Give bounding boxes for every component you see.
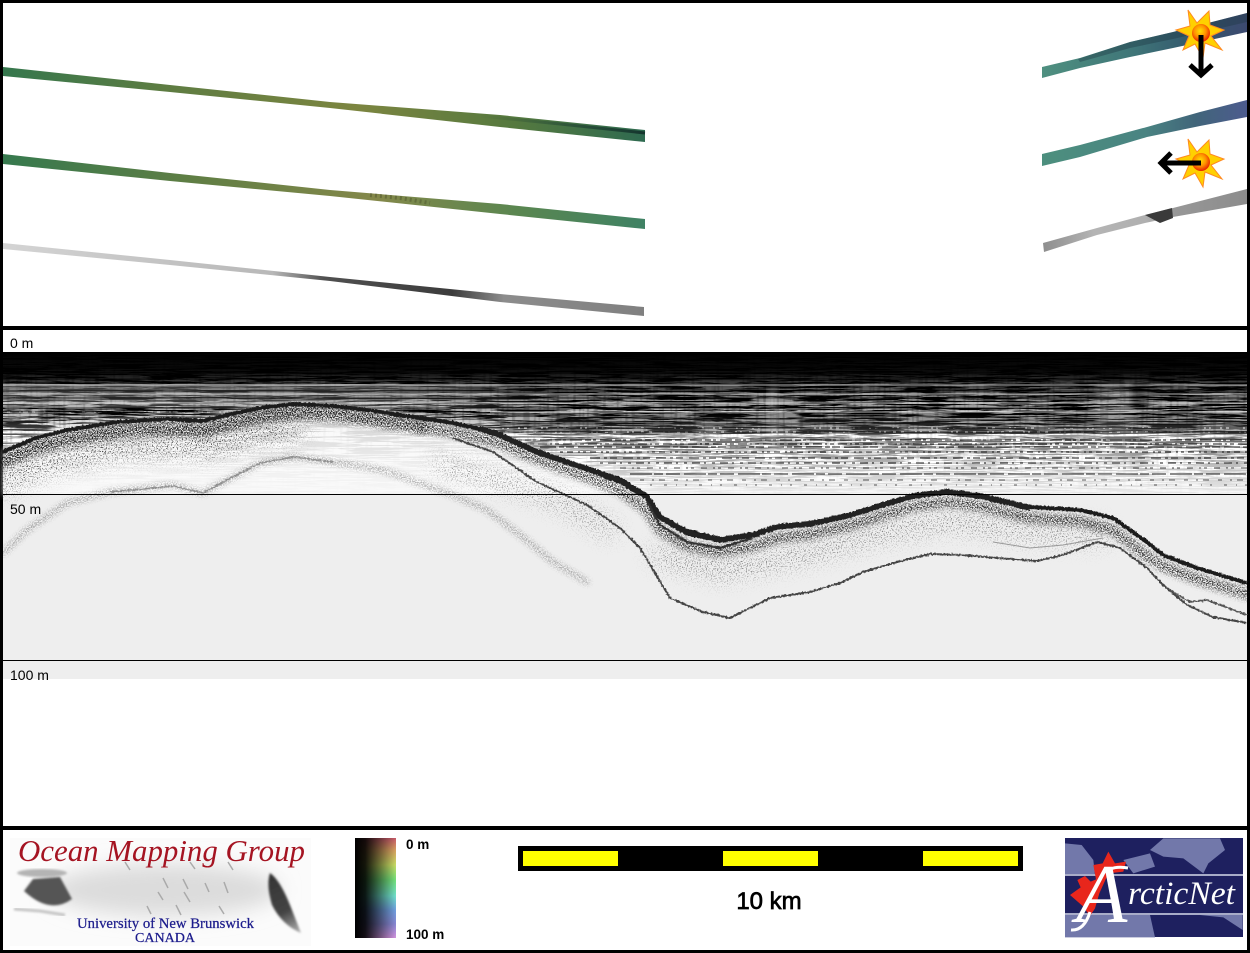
text: ArcticNet initial A: A — [1071, 848, 1128, 941]
title: Ocean Mapping Group: Ocean Mapping Group — [18, 833, 305, 868]
icon: multibeam fan, left — [14, 869, 72, 915]
icon: swash of the letter A — [1071, 867, 1128, 930]
label: 0 m: 0 m — [406, 837, 429, 852]
text: rcticNet: rcticNet — [1128, 876, 1236, 912]
text: Canada: CANADA — [135, 931, 196, 946]
swath: sun-illuminated from north, west section — [3, 67, 645, 142]
swath: backscatter, west section — [3, 243, 644, 316]
label: 50 m: 50 m — [10, 501, 41, 517]
chart: speckle halos under reflectors — [3, 412, 1247, 594]
chart: echogram water column — [3, 352, 1247, 494]
scale bar — [518, 846, 1023, 915]
label: 100 m: 100 m — [10, 667, 49, 683]
arrow: light direction west — [1161, 153, 1201, 173]
chart: echogram lower water and sediment background — [3, 494, 1247, 679]
icon: maple leaf — [1070, 852, 1126, 916]
chart: seafloor reflector — [3, 404, 1247, 583]
chart: deep reflector — [453, 438, 1247, 623]
text: University of New Brunswick: University of New Brunswick — [77, 916, 254, 932]
swath: sun-illuminated from east, east section — [1042, 100, 1247, 166]
label: 10 km: 10 km — [736, 888, 802, 915]
chart: sediment below seafloor, upper veil — [3, 403, 647, 495]
icon: sun, east illumination — [1176, 139, 1224, 187]
label: 0 m: 0 m — [10, 335, 33, 351]
chart: 100 m depth line — [3, 660, 1247, 662]
swath: sun-illuminated from east, west section — [3, 154, 645, 229]
chart: thick seafloor section — [480, 429, 1030, 540]
chart: second sub-bottom reflector — [647, 502, 753, 548]
chart: 50 m depth line — [3, 494, 1247, 496]
panel: sub-bottom profile — [3, 330, 1247, 826]
logo: Ocean Mapping Group — [10, 833, 311, 946]
arrow: light direction south — [1190, 35, 1212, 75]
chart: dashed noise bands in the lower water column — [3, 412, 1247, 485]
chart: faint sediment layer — [993, 538, 1103, 548]
icon: sun, north illumination — [1176, 10, 1224, 58]
chart: right-hand branching reflector — [1170, 590, 1247, 615]
icon: seabed scour marks — [125, 862, 233, 915]
logo: ArcticNet — [1065, 838, 1243, 941]
panel: footer — [3, 830, 1247, 950]
swath: backscatter, east section — [1043, 189, 1247, 252]
label: 100 m: 100 m — [406, 927, 444, 942]
map: Arctic landmasses — [1065, 838, 1243, 937]
swath: sun-illuminated from north, east section — [1042, 13, 1247, 78]
icon: multibeam fan, right — [268, 873, 301, 933]
panel: swath overview — [3, 3, 1247, 326]
legend: depth colour scale — [355, 837, 444, 942]
chart: multiple echo on the left — [110, 457, 333, 493]
